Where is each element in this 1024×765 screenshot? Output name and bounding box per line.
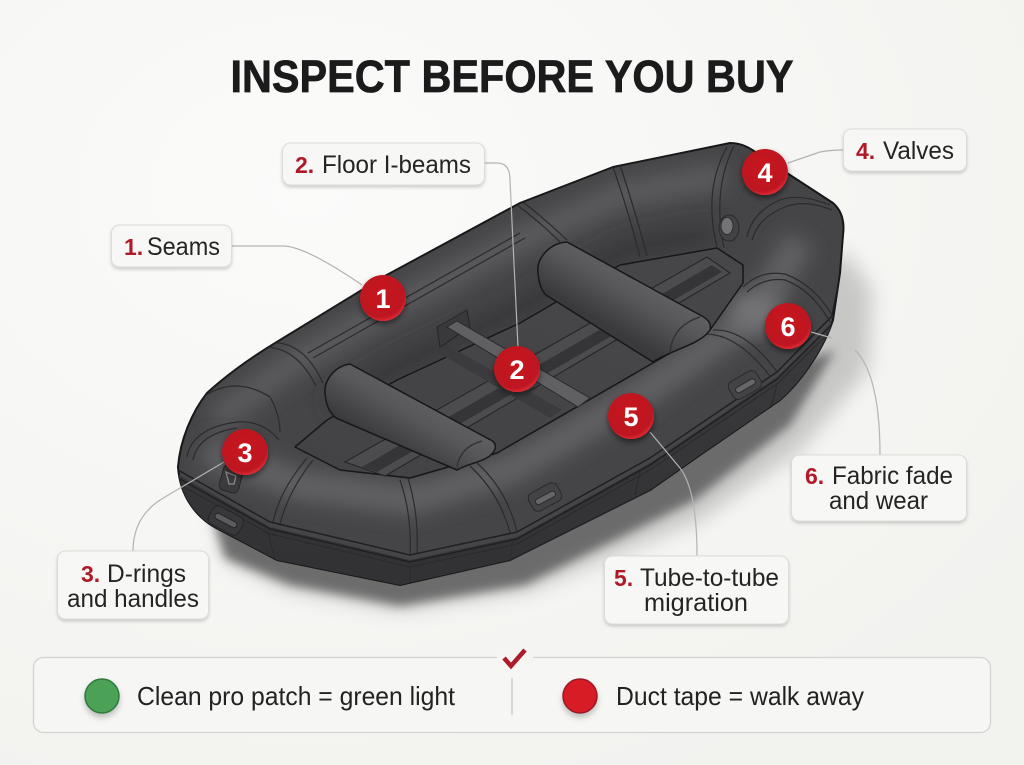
floor I-beam cross bar	[437, 310, 590, 418]
callout 6: Fabric fade and wear	[792, 455, 966, 521]
floor keel strips	[345, 257, 730, 476]
marker 5: 5	[623, 402, 639, 432]
marker 5	[608, 393, 654, 439]
far tube inner dark wall	[368, 226, 709, 382]
boat ground shadow: wide soft	[215, 252, 872, 610]
marker 2: 2	[509, 355, 525, 385]
near tube highlight	[205, 240, 800, 500]
callout 3: D-rings and handles	[58, 551, 208, 619]
callout 2: Floor I-beams: Floor I-beams	[322, 151, 471, 179]
boat ground shadow: contact	[212, 350, 835, 606]
callout 4: Valves	[844, 129, 966, 171]
rear thwart	[538, 242, 710, 362]
callout 6: Fabric fade and wear: 6.	[805, 463, 824, 489]
rear thwart end cap	[670, 317, 700, 353]
callout 6: Fabric fade and wear: and wear	[829, 487, 928, 515]
marker 6: 6	[780, 312, 796, 342]
boat hull	[178, 143, 844, 585]
panel divider	[511, 678, 513, 715]
tube shading	[170, 146, 860, 600]
front thwart	[325, 364, 495, 470]
callout 1: Seams: Seams	[147, 233, 220, 261]
lower side band	[179, 326, 831, 585]
handle: side right	[726, 368, 764, 402]
callout 4: Valves: Valves	[883, 137, 954, 165]
callout 3: D-rings and handles: and handles	[67, 585, 199, 613]
callout 6: Fabric fade and wear: Fabric fade	[832, 462, 953, 490]
marker 3: 3	[237, 438, 253, 468]
D-ring	[218, 464, 244, 494]
marker 4: 4	[757, 158, 773, 188]
green light text: Clean pro patch = green light	[137, 681, 456, 711]
handle: side front	[526, 481, 564, 513]
callout 5: Tube-to-tube migration: 5.	[614, 565, 633, 591]
red light dot	[563, 679, 597, 713]
marker 1	[360, 275, 406, 321]
marker 2	[494, 346, 540, 392]
green light dot	[85, 679, 119, 713]
leader lines	[133, 150, 880, 556]
callout 1: Seams	[112, 225, 232, 267]
rub strake lines	[178, 265, 842, 567]
marker 4	[742, 149, 788, 195]
floor	[295, 248, 743, 478]
front thwart end cap	[457, 441, 482, 467]
marker 3	[222, 429, 268, 475]
marker 6	[765, 303, 811, 349]
boat illustration	[170, 143, 872, 610]
handle: stern	[206, 504, 246, 537]
title: INSPECT BEFORE YOU BUY	[230, 51, 794, 102]
near tube bright patch	[729, 292, 781, 332]
callout 2: Floor I-beams: 2.	[295, 152, 314, 178]
marker 1: 1	[375, 284, 391, 314]
callout 2: Floor I-beams	[282, 143, 484, 185]
valve	[719, 215, 739, 241]
callout 5: Tube-to-tube migration	[604, 556, 788, 624]
check mark icon	[497, 650, 533, 666]
red light text: Duct tape = walk away	[616, 681, 864, 711]
callout 3: D-rings and handles: D-rings	[107, 560, 186, 588]
far tube highlight	[215, 175, 725, 420]
bottom verdict panel	[34, 650, 990, 732]
callout 4: Valves: 4.	[856, 138, 875, 164]
callout 3: D-rings and handles: 3.	[81, 561, 100, 587]
callout 5: Tube-to-tube migration: migration	[644, 589, 748, 617]
tube seams	[187, 146, 833, 585]
callout 1: Seams: 1.	[124, 234, 143, 260]
callout 5: Tube-to-tube migration: Tube-to-tube	[640, 564, 779, 592]
